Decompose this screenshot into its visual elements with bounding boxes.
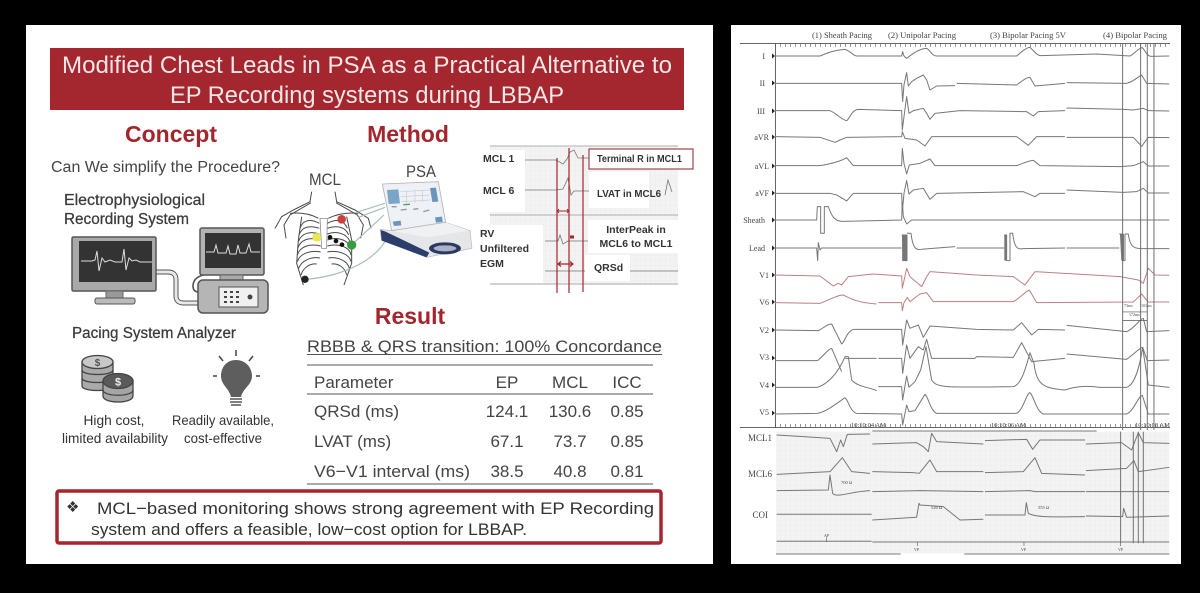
label: electrophysiological recording system: Electrophysiological — [64, 192, 205, 209]
label: PSA: PSA — [406, 162, 437, 181]
labels: PSA channels: MCL1 — [748, 433, 772, 443]
row: QRSd: 0.85 — [610, 402, 644, 421]
heading: result: Result — [375, 303, 445, 329]
conclusion callout: ❖ — [66, 499, 79, 516]
impedance values: 555 Ω — [1038, 505, 1050, 510]
time ruler and axes: 10:10:04 AM — [851, 422, 886, 429]
lead labels — [743, 52, 770, 417]
caliper measurements — [1124, 303, 1152, 317]
ECG figure labels: QRSd — [594, 262, 623, 274]
pacing mode headers: (1) Sheath Pacing — [812, 31, 872, 40]
caption: readily available: Readily available, — [172, 412, 274, 428]
table header — [314, 373, 642, 392]
ECG figure labels: MCL 6 — [483, 185, 514, 197]
lead labels: V5 — [759, 408, 769, 417]
lead labels: I — [762, 52, 765, 61]
conclusion callout: system and offers a feasible, low−cost option for LBBAP. — [91, 520, 527, 539]
table header: EP — [496, 373, 518, 392]
panel: ECG tracings — [731, 25, 1181, 564]
icon: coin stacks: $ — [95, 358, 101, 369]
surface ECG tracings: chest leads — [775, 290, 1169, 425]
lead labels: aVR — [754, 133, 770, 142]
caption: readily available — [172, 412, 274, 446]
caption: readily available: cost-effective — [184, 430, 262, 446]
caliper measurements: 172ms — [1129, 312, 1140, 317]
surface ECG tracings: limb leads — [775, 47, 1169, 288]
row: QRSd — [314, 402, 644, 421]
pacing mode headers: (3) Bipolar Pacing 5V — [990, 31, 1066, 40]
row: QRSd: QRSd (ms) — [314, 402, 399, 421]
ECG figure labels: MCL6 to MCL1 — [600, 238, 673, 250]
ECG figure labels: RV — [480, 228, 494, 240]
result subtitle: RBBB & QRS transition: 100% Concordance — [307, 337, 662, 356]
impedance values: VP — [914, 547, 920, 552]
label: electrophysiological recording system: Recording System — [64, 211, 189, 228]
impedance values: 526 Ω — [931, 505, 943, 510]
row: LVAT: 73.7 — [553, 432, 587, 451]
pacing mode headers: (4) Bipolar Pacing — [1103, 31, 1167, 40]
panel: summary slide — [26, 25, 713, 564]
row: LVAT: 67.1 — [490, 432, 524, 451]
impedance values: 700 Ω — [841, 480, 853, 485]
ECG figure labels: InterPeak in — [606, 224, 666, 236]
row: V6-V1 interval — [314, 462, 644, 481]
ECG figure labels: Unfiltered — [480, 243, 529, 255]
ECG figure labels: MCL 1 — [483, 153, 514, 165]
time ruler and axes: 10:10:06 AM — [991, 422, 1026, 429]
heading: method: Method — [367, 121, 449, 147]
lead labels: II — [760, 79, 765, 88]
illustration: ECG annotation figure — [477, 146, 693, 293]
heading: concept: Concept — [125, 121, 217, 147]
table header: MCL — [552, 373, 588, 392]
lead labels: V3 — [759, 353, 769, 362]
illustration: PSA device — [380, 182, 472, 257]
row: LVAT: 0.85 — [610, 432, 644, 451]
icon: EP recording system — [72, 228, 268, 313]
pacing mode headers — [812, 31, 1167, 40]
lead labels: aVL — [755, 162, 769, 171]
callout: terminal R: Terminal R in MCL1 — [597, 153, 682, 165]
row: V6-V1 interval: 40.8 — [553, 462, 587, 481]
row: QRSd: 124.1 — [486, 402, 528, 421]
title banner: Modified Chest Leads in PSA as a Practical Alternative to — [62, 52, 672, 79]
lead labels: aVF — [755, 189, 770, 198]
lead labels: Sheath — [743, 216, 765, 225]
ECG figure labels: EGM — [480, 258, 504, 270]
panel: PSA recording — [776, 431, 1169, 554]
impedance values: AP — [824, 533, 830, 538]
label: MCL: MCL — [309, 170, 341, 189]
callout: terminal R — [589, 149, 693, 169]
labels: PSA channels: COI — [752, 510, 768, 520]
results table — [307, 365, 653, 484]
lead labels: Lead — [749, 244, 765, 253]
title banner — [50, 48, 684, 110]
lead labels: V4 — [759, 381, 769, 390]
lead labels: V6 — [759, 298, 769, 307]
title banner: EP Recording systems during LBBAP — [170, 82, 564, 109]
row: QRSd: 130.6 — [549, 402, 591, 421]
label: electrophysiological recording system — [64, 192, 205, 228]
caliper measurements: 73ms — [1124, 303, 1133, 308]
lead labels: V2 — [759, 326, 769, 335]
caption: high cost: High cost, — [84, 412, 144, 428]
caption: high cost — [62, 412, 168, 446]
time ruler and axes: 10:10:08 AM — [1135, 422, 1170, 429]
labels: PSA channels: MCL6 — [748, 469, 772, 479]
impedance values: VP — [1118, 547, 1124, 552]
impedance values: VP — [1021, 547, 1027, 552]
lead arrow markers — [772, 54, 775, 416]
caption: high cost: limited availability — [62, 430, 168, 446]
caliper measurements: 101ms — [1141, 303, 1152, 308]
caliper lines: surface ECG — [1123, 44, 1154, 430]
ECG figure labels: LVAT in MCL6 — [597, 188, 661, 200]
conclusion callout: MCL−based monitoring shows strong agreement with EP Recording — [97, 499, 654, 518]
lead labels: III — [757, 107, 765, 116]
conclusion callout — [57, 491, 661, 543]
pacing mode headers: (2) Unipolar Pacing — [888, 31, 956, 40]
table header: ICC — [612, 373, 642, 392]
icon: coin stacks: $ — [115, 376, 121, 388]
MCL traces — [525, 150, 678, 271]
lead labels: V1 — [759, 271, 769, 280]
icon: coin stacks — [82, 356, 133, 402]
labels: PSA channels — [748, 433, 772, 520]
row: V6-V1 interval: 38.5 — [490, 462, 524, 481]
table header: Parameter — [314, 373, 394, 392]
icon: light bulb — [213, 350, 260, 405]
ECG figure labels — [480, 153, 673, 274]
label: pacing system analyzer: Pacing System Analyzer — [72, 325, 236, 342]
row: LVAT — [314, 432, 644, 451]
concept question: Can We simplify the Procedure? — [51, 159, 280, 176]
illustration: chest with MCL electrodes — [275, 192, 386, 285]
time ruler and axes — [740, 43, 1170, 429]
impedance values — [824, 480, 1124, 552]
row: V6-V1 interval: V6−V1 interval (ms) — [314, 462, 470, 481]
row: V6-V1 interval: 0.81 — [610, 462, 644, 481]
row: LVAT: LVAT (ms) — [314, 432, 391, 451]
